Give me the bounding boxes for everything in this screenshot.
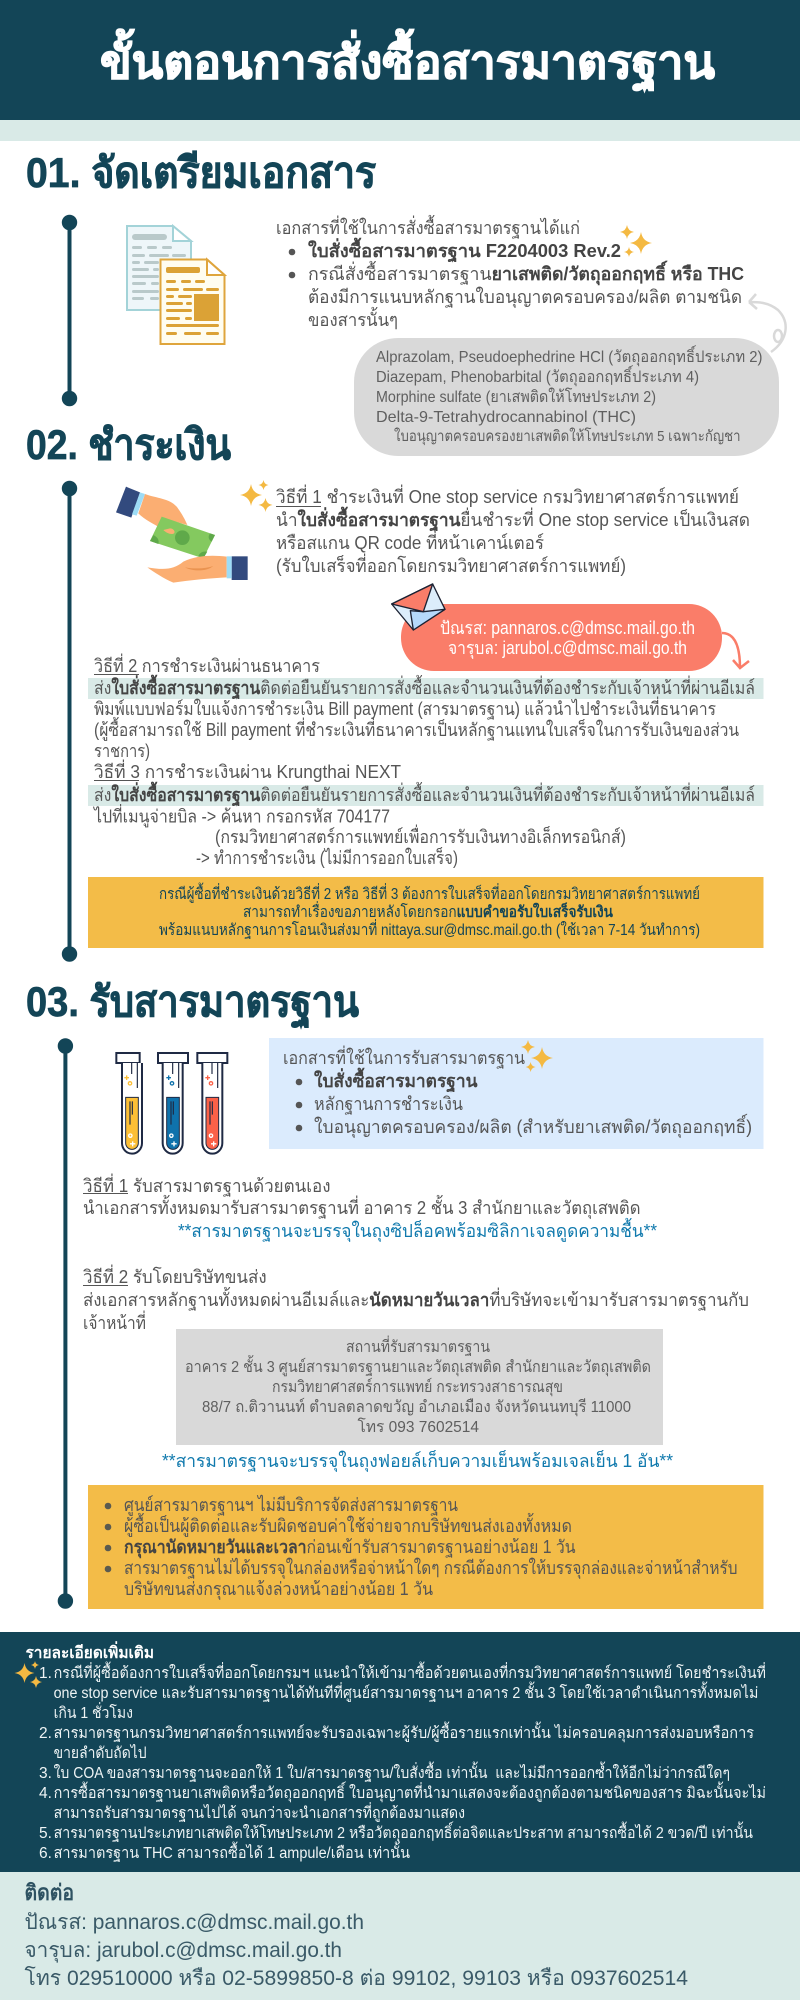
panel: pickup address: 88/7 ถ.ติวานนท์ ตำบลตลาดขวัญ อำเภอเมือง จังหวัดนนทบุรี 11000 bbox=[202, 1397, 631, 1417]
text: contact details: โทร 029510000 หรือ 02-5899850-8 ต่อ 99102, 99103 หรือ 0937602514 bbox=[24, 1966, 688, 1990]
list: notes: 5. bbox=[39, 1825, 52, 1842]
text: documents needed to order: ใบสั่งซื้อสารมาตรฐาน F2204003 Rev.2 bbox=[308, 237, 621, 263]
timeline: section 01 bbox=[62, 215, 77, 406]
text: pickup method 2 bbox=[83, 1264, 749, 1333]
text: payment method 2: พิมพ์แบบฟอร์มใบแจ้งการชำระเงิน Bill payment (สารมาตรฐาน) แล้วนำไปชำระเงินที่ธนาคาร bbox=[94, 696, 716, 720]
text: pickup method 1 bbox=[83, 1173, 657, 1242]
text: payment method 1: นำใบสั่งซื้อสารมาตรฐานยื่นชำระที่ One stop service เป็นเงินสด bbox=[276, 506, 750, 532]
panel: documents for receiving: ใบสั่งซื้อสารมาตรฐาน bbox=[314, 1067, 478, 1093]
callout: delivery conditions: ผู้ซื้อเป็นผู้ติดต่อและรับผิดชอบค่าใช้จ่ายจากบริษัทขนส่งเองทั้งหมด bbox=[124, 1513, 572, 1537]
panel: substances callout: Alprazolam, Pseudoephedrine HCl (วัตถุออกฤทธิ์ประเภท 2) bbox=[376, 345, 762, 367]
panel: documents for receiving: หลักฐานการชำระเงิน bbox=[314, 1094, 463, 1115]
panel: pickup address: อาคาร 2 ชั้น 3 ศูนย์สารมาตรฐานยาและวัตถุเสพติด สำนักยาและวัตถุเสพติด bbox=[185, 1355, 651, 1377]
text: pickup method 1: วิธีที่ 1 รับสารมาตรฐานด้วยตนเอง bbox=[83, 1173, 330, 1197]
text: documents needed to order: เอกสารที่ใช้ในการสั่งซื้อสารมาตรฐานได้แก่ bbox=[276, 215, 580, 239]
heading: section 01: 01. จัดเตรียมเอกสาร bbox=[26, 149, 376, 196]
text: payment method 1: หรือสแกน QR code ที่หน้าเคาน์เตอร์ bbox=[276, 530, 544, 553]
callout: receipt note: พร้อมแนบหลักฐานการโอนเงินส่งมาที่ nittaya.sur@dmsc.mail.go.th (ใช้เวลา 7-14 วันทำการ) bbox=[159, 919, 700, 939]
panel: pickup address bbox=[176, 1329, 663, 1445]
text: contact details bbox=[24, 1911, 688, 1990]
list: notes: ใบ COA ของสารมาตรฐานจะออกให้ 1 ใบ/สารมาตรฐาน/ใบสั่งซื้อ เท่านั้น และไม่มีการออกซ้ำให้อีกไม่ว่ากรณีใดๆ bbox=[54, 1761, 730, 1782]
text: documents needed to order: กรณีสั่งซื้อสารมาตรฐานยาเสพติด/วัตถุออกฤทธิ์ หรือ THC bbox=[308, 260, 744, 286]
list: notes: สามารถรับสารมาตรฐานไปได้ จนกว่าจะนำเอกสารที่ถูกต้องมาแสดง bbox=[54, 1802, 465, 1823]
panel: substances callout: Delta-9-Tetrahydrocannabinol (THC) bbox=[376, 409, 636, 426]
callout: delivery conditions bbox=[88, 1485, 764, 1609]
list: notes: สารมาตรฐาน THC สามารถซื้อได้ 1 ampule/เดือน เท่านั้น bbox=[54, 1841, 410, 1862]
text: pickup method 2: ส่งเอกสารหลักฐานทั้งหมดผ่านอีเมล์และนัดหมายวันเวลาที่บริษัทจะเข้ามารับสารมาตรฐานกับ bbox=[83, 1287, 749, 1311]
text: documents needed to order bbox=[276, 215, 744, 330]
text: payment method 3: วิธีที่ 3 การชำระเงินผ่าน Krungthai NEXT bbox=[94, 759, 401, 782]
panel: documents for receiving bbox=[269, 1038, 764, 1149]
callout: delivery conditions: ศูนย์สารมาตรฐานฯ ไม่มีบริการจัดส่งสารมาตรฐาน bbox=[124, 1494, 458, 1516]
header banner bbox=[0, 0, 800, 141]
icon: envelope bbox=[392, 584, 445, 630]
panel: pickup address: กรมวิทยาศาสตร์การแพทย์ กระทรวงสาธารณสุข bbox=[272, 1377, 563, 1397]
heading: contact: ติดต่อ bbox=[24, 1880, 74, 1905]
text: pickup method 2: เจ้าหน้าที่ bbox=[83, 1310, 146, 1333]
text: pickup method 2: วิธีที่ 2 รับโดยบริษัทขนส่ง bbox=[83, 1264, 267, 1287]
arrow: grey curl to bubble bbox=[749, 294, 786, 352]
list: notes: กรณีที่ผู้ซื้อต้องการใบเสร็จที่ออกโดยกรมฯ แนะนำให้เข้ามาซื้อด้วยตนเองที่กรมวิทยาศาสตร์การแพทย์ โดยชำระเงินที่ bbox=[54, 1661, 766, 1683]
title: ขั้นตอนการสั่งซื้อสารมาตรฐาน bbox=[100, 28, 716, 92]
timeline: section 03 bbox=[58, 1038, 73, 1609]
icon: test tubes bbox=[116, 1053, 227, 1154]
panel: pickup address: โทร 093 7602514 bbox=[358, 1417, 479, 1436]
panel: additional details bbox=[0, 1632, 800, 1872]
heading: section 02: 02. ชำระเงิน bbox=[26, 421, 231, 468]
text: payment method 1: (รับใบเสร็จที่ออกโดยกรมวิทยาศาสตร์การแพทย์) bbox=[276, 553, 626, 576]
callout: receipt note: สามารถทำเรื่องขอภายหลังโดยกรอกแบบคำขอรับใบเสร็จรับเงิน bbox=[243, 901, 613, 921]
panel: documents for receiving: เอกสารที่ใช้ในการรับสารมาตรฐาน bbox=[283, 1045, 525, 1069]
panel: email pill bbox=[401, 604, 722, 671]
panel: email pill: จารุบล: jarubol.c@dmsc.mail.go.th bbox=[448, 638, 687, 659]
text: payment method 3: ไปที่เมนูจ่ายบิล -> ค้นหา กรอกรหัส 704177 bbox=[92, 804, 390, 828]
text: payment method 3: (กรมวิทยาศาสตร์การแพทย์เพื่อการรับเงินทางอิเล็กทรอนิกส์) bbox=[215, 824, 626, 847]
list: notes: การซื้อสารมาตรฐานยาเสพติดหรือวัตถุออกฤทธิ์ ใบอนุญาตที่นำมาแสดงจะต้องถูกต้องตามชนิดของสาร มิฉะนั้นจะไม่ bbox=[54, 1781, 766, 1803]
list: notes: สารมาตรฐานประเภทยาเสพติดให้โทษประเภท 2 หรือวัตถุออกฤทธิ์ต่อจิตและประสาท สามารถซื้อได้ 2 ขวด/ปี เท่านั้น bbox=[54, 1821, 753, 1843]
icon: money between hands bbox=[116, 487, 248, 583]
text: contact details: จารุบล: jarubol.c@dmsc.mail.go.th bbox=[24, 1939, 342, 1963]
text: payment method 2: ราชการ) bbox=[94, 741, 150, 761]
icon: sparkles bbox=[620, 225, 652, 257]
list: notes: one stop service และรับสารมาตรฐานได้ทันทีที่ศูนย์สารมาตรฐานฯ อาคาร 2 ชั้น 3 โดยใช้เวลาดำเนินการทั้งหมดไม่ bbox=[54, 1681, 758, 1703]
text: payment method 1 bbox=[276, 484, 750, 576]
list: notes: ขายลำดับถัดไป bbox=[54, 1744, 147, 1762]
panel: pickup address: สถานที่รับสารมาตรฐาน bbox=[346, 1335, 490, 1356]
panel: substances callout bbox=[354, 338, 779, 456]
list: notes: 4. bbox=[39, 1785, 52, 1802]
panel: email pill: ปัณรส: pannaros.c@dmsc.mail.go.th bbox=[440, 618, 695, 638]
icon: sparkles bbox=[14, 1661, 42, 1688]
text: contact details: ปัณรส: pannaros.c@dmsc.mail.go.th bbox=[24, 1911, 364, 1934]
panel: substances callout: Morphine sulfate (ยาเสพติดให้โทษประเภท 2) bbox=[376, 387, 656, 406]
list: notes: 1. bbox=[39, 1665, 52, 1682]
list: notes: 3. bbox=[39, 1765, 52, 1782]
callout: receipt note bbox=[88, 877, 764, 948]
panel: substances callout: Diazepam, Phenobarbital (วัตถุออกฤทธิ์ประเภท 4) bbox=[376, 365, 699, 387]
text: documents needed to order: ของสารนั้นๆ bbox=[308, 307, 398, 330]
panel: documents for receiving: ใบอนุญาตครอบครอง/ผลิต (สำหรับยาเสพติด/วัตถุออกฤทธิ์) bbox=[314, 1113, 752, 1138]
heading: section 03: 03. รับสารมาตรฐาน bbox=[26, 978, 359, 1029]
callout: delivery conditions: กรุณานัดหมายวันและเวลาก่อนเข้ารับสารมาตรฐานอย่างน้อย 1 วัน bbox=[124, 1537, 576, 1559]
text: pickup method 1: นำเอกสารทั้งหมดมารับสารมาตรฐานที่ อาคาร 2 ชั้น 3 สำนักยาและวัตถุเสพติด bbox=[83, 1195, 640, 1219]
icon: documents bbox=[127, 226, 224, 344]
heading: additional details: รายละเอียดเพิ่มเติม bbox=[26, 1641, 154, 1662]
text: payment method 1: วิธีที่ 1 ชำระเงินที่ One stop service กรมวิทยาศาสตร์การแพทย์ bbox=[276, 484, 739, 507]
list: notes bbox=[39, 1661, 766, 1862]
panel: contact bbox=[0, 1872, 800, 2000]
arrow: salmon curve bbox=[722, 633, 749, 668]
text: payment method 2: วิธีที่ 2 การชำระเงินผ่านธนาคาร bbox=[94, 653, 320, 676]
text: payment method 3: -> ทำการชำระเงิน (ไม่มีการออกใบเสร็จ) bbox=[196, 846, 458, 868]
text: documents needed to order: ต้องมีการแนบหลักฐานใบอนุญาตครอบครอง/ผลิต ตามชนิด bbox=[308, 286, 742, 308]
list: notes: 2. bbox=[39, 1725, 52, 1742]
list: notes: สารมาตรฐานกรมวิทยาศาสตร์การแพทย์จะรับรองเฉพาะผู้รับ/ผู้ซื้อรายแรกเท่านั้น ไม่ครอบคลุมการส่งมอบหรือการ bbox=[54, 1721, 754, 1743]
note: foil packaging: **สารมาตรฐานจะบรรจุในถุงฟอยล์เก็บความเย็นพร้อมเจลเย็น 1 อัน** bbox=[162, 1449, 673, 1472]
callout: delivery conditions: บริษัทขนส่งกรุณาแจ้งล่วงหน้าอย่างน้อย 1 วัน bbox=[124, 1579, 433, 1600]
timeline: section 02 bbox=[62, 481, 77, 962]
icon: sparkles bbox=[521, 1040, 553, 1072]
icon: sparkles bbox=[240, 480, 272, 512]
text: payment method 2 bbox=[88, 653, 764, 761]
callout: receipt note: กรณีผู้ซื้อที่ชำระเงินด้วยวิธีที่ 2 หรือ วิธีที่ 3 ต้องการใบเสร็จที่ออกโดยกรมวิทยาศาสตร์การแพทย์ bbox=[159, 882, 700, 904]
panel: substances callout: ใบอนุญาตครอบครองยาเสพติดให้โทษประเภท 5 เฉพาะกัญชา bbox=[394, 427, 740, 446]
text: payment method 3 bbox=[88, 759, 764, 868]
text: pickup method 1: **สารมาตรฐานจะบรรจุในถุงซิปล็อคพร้อมซิลิกาเจลดูดความชื้น** bbox=[178, 1218, 657, 1242]
list: notes: เกิน 1 ชั่วโมง bbox=[54, 1702, 133, 1722]
list: notes: 6. bbox=[39, 1845, 52, 1862]
